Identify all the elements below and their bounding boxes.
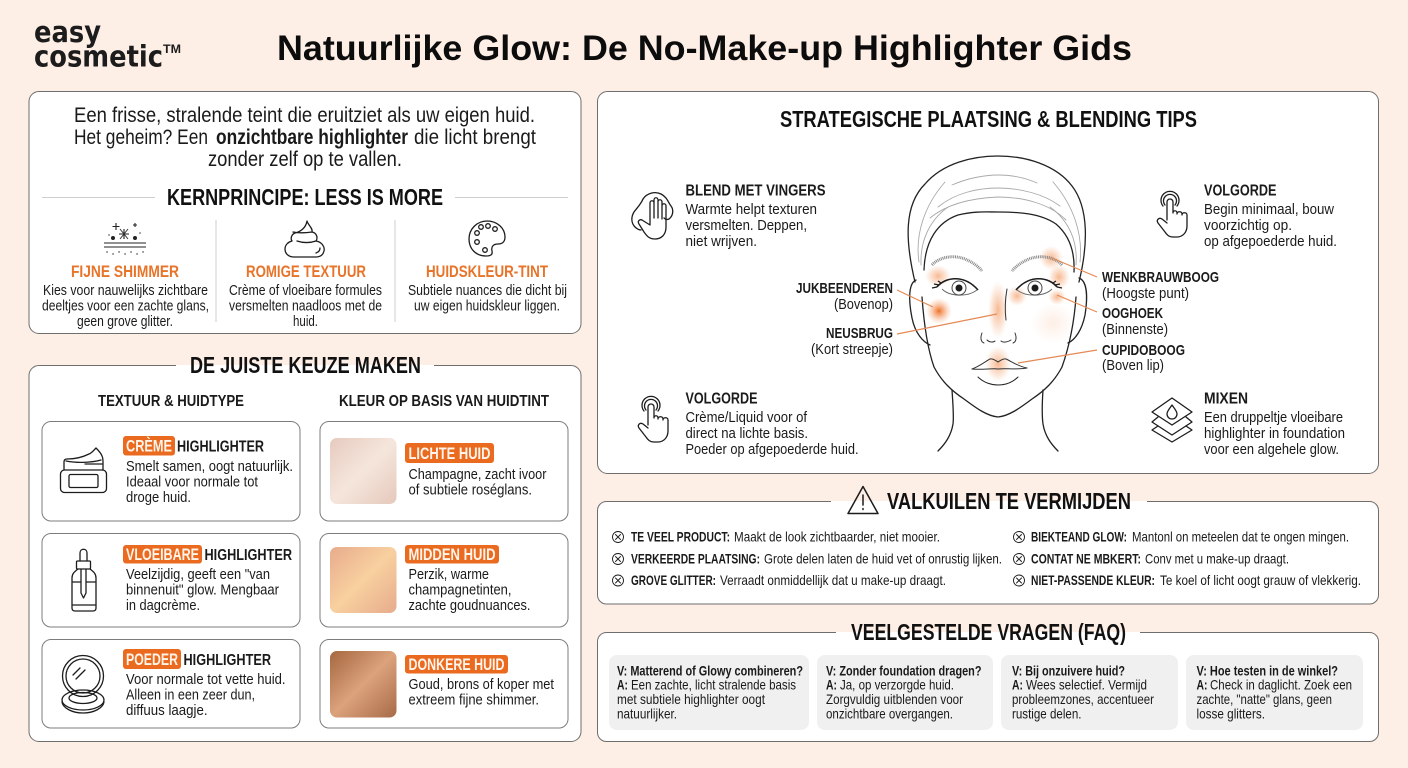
- left eye and brow: [932, 257, 982, 295]
- column: fijne shimmer: FIJNE SHIMMER: [71, 263, 179, 281]
- column: romige textuur: versmelten naadloos met de: [229, 298, 382, 314]
- card: creme highlighter: CRÈME: [126, 436, 172, 456]
- faq card: testen in de winkel: Check in daglicht. Zoek een: [1210, 676, 1352, 692]
- column: romige textuur: Crème of vloeibare formules: [229, 282, 382, 299]
- panel: de juiste keuze maken: [29, 352, 581, 742]
- text: midden huid: [408, 566, 530, 614]
- nose: [981, 289, 1016, 343]
- faq card: zonder foundation: Ja, op verzorgde huid.: [840, 676, 954, 692]
- subheading: kleur op basis van huidtint: KLEUR OP BASIS VAN HUIDTINT: [339, 393, 549, 410]
- card: midden huid: [320, 534, 568, 627]
- icon: cream swirl: [285, 221, 324, 257]
- tag: midden huid: [405, 545, 499, 564]
- title: Natuurlijke Glow: De No-Make-up Highlighter Gids: [277, 29, 1132, 68]
- faq card: onzuivere huid: Wees selectief. Vermijd: [1026, 676, 1147, 692]
- tip: volgorde links: Crème/Liquid voor of: [686, 409, 808, 426]
- text: donkere huid: [408, 676, 555, 708]
- card: vloeibare highlighter: [42, 534, 300, 627]
- item: contat ne mbkert: CONTAT NE MBKERT:: [1031, 550, 1141, 566]
- text: midden huid: champagnetinten,: [408, 582, 512, 598]
- faq card: testen in de winkel: zachte, "natte" glans, geen: [1196, 691, 1332, 707]
- heading: valkuilen: VALKUILEN TE VERMIJDEN: [887, 488, 1131, 514]
- intro text: [74, 103, 536, 171]
- faq card: testen in de winkel: V: Hoe testen in de winkel?: [1196, 662, 1338, 678]
- text: vloeibare: Veelzijdig, geeft een "van: [126, 566, 270, 583]
- faq card: zonder foundation: V: Zonder foundation dragen?: [826, 662, 982, 678]
- tip: mixen: highlighter in foundation: [1204, 425, 1345, 442]
- icon: compact: [62, 656, 104, 713]
- card: lichte huid: [320, 422, 568, 521]
- text: poeder: diffuus laagje.: [126, 702, 208, 719]
- card: poeder highlighter: POEDER: [126, 651, 178, 669]
- faq card: zonder foundation: [817, 655, 993, 730]
- text: poeder: Voor normale tot vette huid.: [126, 671, 286, 688]
- item: verkeerde plaatsing: VERKEERDE PLAATSING:: [631, 550, 760, 566]
- tip: blend met vingers: versmelten. Deppen,: [686, 217, 807, 234]
- label: neusbrug: [811, 325, 893, 358]
- label: neusbrug: (Kort streepje): [811, 341, 893, 358]
- swatch: donkere huid: [330, 651, 396, 718]
- label: cupidoboog: (Boven lip): [1102, 357, 1164, 374]
- label: ooghoek: [1102, 305, 1168, 338]
- tip: volgorde links: Poeder op afgepoederde huid.: [686, 441, 858, 458]
- text: lichte huid: [408, 466, 547, 498]
- item: grove glitter: [612, 572, 946, 588]
- card: vloeibare highlighter: VLOEIBARE: [126, 546, 199, 564]
- item: te veel product: TE VEEL PRODUCT:: [631, 528, 730, 544]
- faq card: matterend of glowy: A:: [617, 676, 628, 692]
- label: wenkbrauwboog: (Hoogste punt): [1102, 285, 1189, 302]
- faq card: onzuivere huid: probleemzones, accentueer: [1012, 691, 1154, 707]
- item: contat ne mbkert: [1014, 550, 1289, 566]
- card: poeder highlighter: [42, 640, 300, 728]
- head outline: [908, 156, 1087, 451]
- card: poeder highlighter: HIGHLIGHTER: [184, 652, 271, 669]
- faq card: onzuivere huid: [1001, 655, 1178, 730]
- column: romige textuur: ROMIGE TEXTUUR: [246, 263, 366, 281]
- item: biekteand glow: [1014, 528, 1349, 544]
- tip: volgorde rechts: voorzichtig op.: [1204, 217, 1292, 234]
- face illustration: [908, 156, 1087, 451]
- intro text: zonder zelf op te vallen.: [208, 147, 402, 171]
- tip: volgorde rechts: [1157, 182, 1337, 250]
- right eye and brow: [1012, 257, 1062, 295]
- intro text: Het geheim? Een: [74, 125, 208, 149]
- text: donkere huid: Goud, brons of koper met: [408, 676, 555, 693]
- tip: blend met vingers: niet wrijven.: [686, 233, 757, 250]
- panel: introductie en kernprincipe: [29, 92, 581, 334]
- column: huidskleur-tint: Subtiele nuances die dicht bij: [408, 282, 567, 299]
- column: huidskleur-tint: HUIDSKLEUR-TINT: [426, 263, 548, 281]
- tip: volgorde rechts: Begin minimaal, bouw: [1204, 201, 1334, 218]
- tip: volgorde rechts: op afgepoederde huid.: [1204, 233, 1337, 250]
- logo: easy cosmetic: easy: [34, 15, 101, 49]
- label: jukbeenderen: (Bovenop): [834, 296, 893, 313]
- text: midden huid: zachte goudnuances.: [408, 597, 530, 614]
- faq card: zonder foundation: A:: [826, 676, 837, 692]
- faq card: matterend of glowy: natuurlijker.: [617, 706, 677, 722]
- icon: layers with drop: [1152, 398, 1192, 442]
- faq card: zonder foundation: onzichtbare overgangen.: [826, 706, 953, 722]
- card: midden huid: MIDDEN HUID: [408, 546, 496, 564]
- leader lines: [897, 258, 1097, 363]
- panel: veelgestelde vragen: [598, 619, 1378, 742]
- highlight zones: [925, 246, 1075, 382]
- label: ooghoek: OOGHOEK: [1102, 305, 1163, 322]
- tip: blend met vingers: BLEND MET VINGERS: [686, 182, 826, 200]
- text: midden huid: Perzik, warme: [408, 566, 489, 583]
- tag: creme: [123, 436, 175, 456]
- label: wenkbrauwboog: WENKBRAUWBOOG: [1102, 269, 1219, 286]
- item: grove glitter: GROVE GLITTER:: [631, 572, 716, 588]
- text: creme: droge huid.: [126, 489, 191, 506]
- item: grove glitter: Verraadt onmiddellijk dat u make-up draagt.: [720, 572, 946, 588]
- column: fijne shimmer: deeltjes voor een zachte glans,: [42, 298, 209, 314]
- icon: warning triangle: [848, 486, 878, 514]
- heading: kernprincipe: KERNPRINCIPE: LESS IS MORE: [167, 184, 443, 210]
- faq card: testen in de winkel: A:: [1196, 676, 1208, 692]
- text: donkere huid: extreem fijne shimmer.: [408, 692, 539, 708]
- card: donkere huid: [320, 640, 568, 728]
- card: creme highlighter: HIGHLIGHTER: [177, 438, 264, 456]
- item: te veel product: [612, 528, 940, 544]
- panel: strategische plaatsing: [598, 92, 1378, 474]
- label: cupidoboog: CUPIDOBOOG: [1102, 342, 1185, 359]
- tip: mixen: Een druppeltje vloeibare: [1204, 409, 1343, 426]
- card: vloeibare highlighter: HIGHLIGHTER: [204, 547, 292, 564]
- faq card: zonder foundation: Zorgvuldig uitblenden voor: [826, 691, 963, 707]
- card: lichte huid: LICHTE HUID: [408, 445, 491, 463]
- faq card: onzuivere huid: V: Bij onzuivere huid?: [1012, 662, 1125, 678]
- intro text: die licht brengt: [414, 125, 536, 149]
- tag: lichte huid: [405, 443, 494, 463]
- tip: blend met vingers: [632, 182, 826, 250]
- faq card: matterend of glowy: met subtiele highlighter oogt: [617, 691, 765, 707]
- item: te veel product: Maakt de look zichtbaarder, niet mooier.: [734, 528, 940, 544]
- tip: mixen: voor een algehele glow.: [1204, 441, 1339, 458]
- tag: poeder: [123, 649, 181, 669]
- icon: shimmer: [104, 223, 146, 254]
- text: vloeibare: [126, 566, 279, 614]
- hair strands: [918, 175, 1081, 265]
- label: jukbeenderen: JUKBEENDEREN: [796, 280, 893, 297]
- icon: jar: [60, 448, 106, 492]
- tip: volgorde rechts: VOLGORDE: [1204, 182, 1277, 200]
- faq card: onzuivere huid: rustige delen.: [1012, 706, 1082, 722]
- tip: volgorde links: [638, 390, 858, 458]
- panel: valkuilen: [598, 486, 1378, 604]
- faq card: matterend of glowy: Een zachte, licht stralende basis: [631, 676, 796, 692]
- subheading: textuur en huidtype: TEXTUUR & HUIDTYPE: [98, 393, 244, 410]
- text: vloeibare: in dagcrème.: [126, 597, 200, 614]
- item: verkeerde plaatsing: Grote delen laten de huid vet of onrustig lijken.: [764, 550, 1002, 566]
- text: poeder: [126, 671, 286, 719]
- text: creme: [126, 458, 293, 506]
- item: biekteand glow: BIEKTEAND GLOW:: [1031, 528, 1127, 544]
- column: romige textuur: huid.: [293, 313, 318, 330]
- faq card: testen in de winkel: [1186, 655, 1363, 730]
- item: biekteand glow: Mantonl on meteelen dat te ongen mingen.: [1132, 528, 1349, 544]
- heading: faq: VEELGESTELDE VRAGEN (FAQ): [851, 619, 1126, 645]
- icon: hand blending: [632, 193, 673, 239]
- tip: volgorde links: direct na lichte basis.: [686, 425, 808, 442]
- faq card: matterend of glowy: [609, 655, 809, 730]
- text: creme: Smelt samen, oogt natuurlijk.: [126, 458, 293, 475]
- tag: donkere huid: [405, 655, 508, 674]
- tag: vloeibare: [123, 545, 202, 564]
- item: verkeerde plaatsing: [612, 550, 1002, 566]
- text: poeder: Alleen in een zeer dun,: [126, 686, 255, 704]
- tip: blend met vingers: Warmte helpt texturen: [686, 201, 817, 218]
- icon: pointing hand: [1157, 191, 1187, 237]
- column: huidskleur-tint: uw eigen huidskleur liggen.: [414, 298, 560, 314]
- label: wenkbrauwboog: [1102, 269, 1219, 302]
- logo: easy cosmetic: TM: [163, 42, 181, 56]
- logo: easy cosmetic: cosmetic: [34, 40, 163, 74]
- logo: easy cosmetic: [34, 15, 181, 74]
- icon: palette: [469, 221, 505, 256]
- column: fijne shimmer: Kies voor nauwelijks zichtbare: [43, 282, 208, 299]
- faq card: matterend of glowy: V: Matterend of Glowy combineren?: [617, 662, 803, 678]
- intro text: onzichtbare highlighter: [216, 125, 409, 149]
- text: creme: Ideaal voor normale tot: [126, 474, 259, 490]
- heading: strategische plaatsing: STRATEGISCHE PLAATSING & BLENDING TIPS: [780, 106, 1197, 132]
- text: vloeibare: binnenuit" glow. Mengbaar: [126, 582, 279, 598]
- column: romige textuur: [229, 263, 382, 330]
- swatch: lichte huid: [330, 438, 396, 504]
- intro text: Een frisse, stralende teint die eruitziet als uw eigen huid.: [74, 103, 535, 127]
- text: lichte huid: Champagne, zacht ivoor: [408, 466, 547, 483]
- tip: volgorde links: VOLGORDE: [686, 390, 758, 408]
- item: niet-passende kleur: [1014, 572, 1361, 588]
- item: niet-passende kleur: NIET-PASSENDE KLEUR:: [1031, 572, 1155, 588]
- faq card: testen in de winkel: losse glitters.: [1196, 706, 1265, 722]
- faq card: onzuivere huid: A:: [1012, 676, 1023, 692]
- label: neusbrug: NEUSBRUG: [826, 325, 893, 342]
- label: jukbeenderen: [796, 280, 893, 313]
- icon: pointing hand: [638, 396, 668, 442]
- card: donkere huid: DONKERE HUID: [408, 656, 505, 674]
- label: ooghoek: (Binnenste): [1102, 321, 1168, 338]
- heading: de juiste keuze maken: DE JUISTE KEUZE MAKEN: [190, 352, 421, 378]
- column: huidskleur-tint: [408, 263, 567, 314]
- tip: mixen: MIXEN: [1204, 390, 1248, 408]
- card: creme highlighter: [42, 422, 300, 521]
- tip: mixen: [1152, 390, 1345, 458]
- text: lichte huid: of subtiele roséglans.: [408, 482, 532, 498]
- item: contat ne mbkert: Conv met u make-up draagt.: [1145, 550, 1289, 566]
- item: niet-passende kleur: Te koel of licht oogt grauw of vlekkerig.: [1160, 572, 1361, 588]
- lips: [972, 359, 1027, 385]
- icon: dropper bottle: [72, 549, 96, 611]
- swatch: midden huid: [330, 547, 396, 613]
- column: fijne shimmer: [42, 263, 209, 330]
- column: fijne shimmer: geen grove glitter.: [77, 313, 173, 330]
- label: cupidoboog: [1102, 342, 1185, 374]
